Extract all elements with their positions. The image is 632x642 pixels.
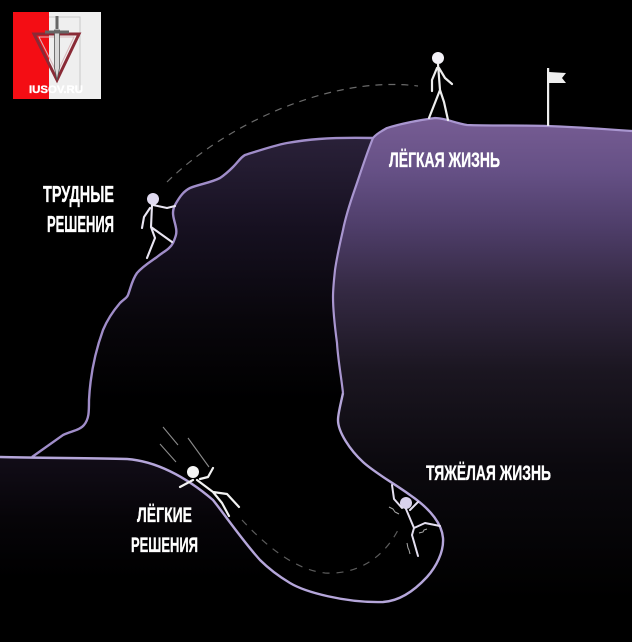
icon: walking figure [429,52,452,120]
label: easy decisions line two: РЕШЕНИЯ [131,534,198,557]
logo: IUSOV.RU: IUSOV.RU [29,84,83,96]
icon: climbing figure [142,193,175,258]
label: hard decisions: ТРУДНЫЕ [43,181,114,207]
label: easy life: ЛЁГКАЯ ЖИЗНЬ [389,149,500,172]
arrow: dashed arc through valley [242,520,398,573]
icon: cracks [389,507,427,554]
panel: easy-decisions valley [0,457,260,642]
icon: pit figure [392,485,440,556]
icon: flag [547,68,566,126]
line: valley and pit outline [0,393,443,602]
arrow: dashed arc to top [167,84,418,182]
icon: motion lines [160,427,209,467]
label: hard life: ТЯЖЁЛАЯ ЖИЗНЬ [426,462,551,485]
icon: falling figure [180,466,239,516]
label: easy decisions: ЛЁГКИЕ [137,504,192,527]
panel: hard-decisions cliff [32,138,373,460]
panel: easy-life plateau [333,118,632,642]
line: plateau outline [333,118,632,393]
label: hard decisions line two: РЕШЕНИЯ [47,211,114,237]
logo: IUSOV.RU [13,12,101,99]
